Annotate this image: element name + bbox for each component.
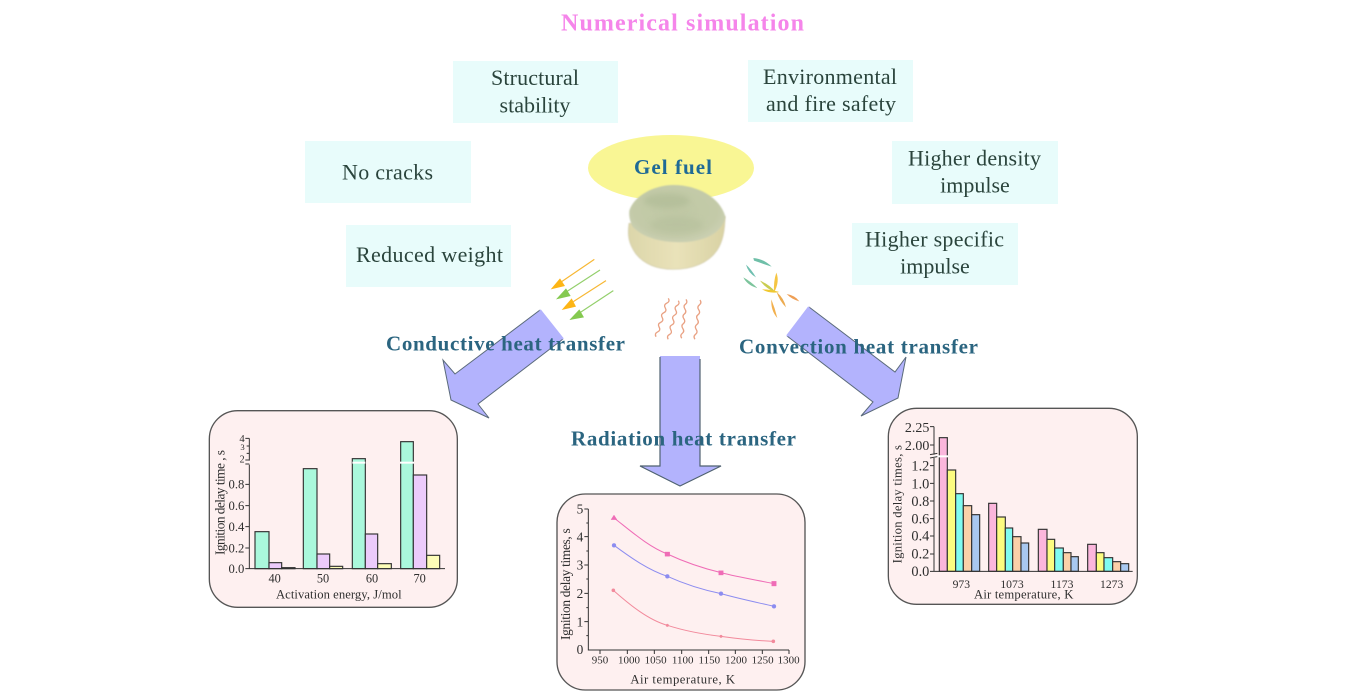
panel: air temperature bar chart: Ignition delay times, s: [890, 445, 904, 563]
label: radiation heat transfer: Radiation heat transfer: [571, 426, 796, 450]
panel: air temperature bar chart: 1273: [1100, 578, 1123, 591]
box: structural stability: Structural: [491, 65, 579, 90]
panel: activation energy bar chart: 2: [240, 455, 245, 466]
panel: air temperature line chart: [557, 494, 805, 690]
panel: air temperature line chart: 4: [577, 529, 584, 544]
line: series pink: [611, 515, 776, 586]
panel: air temperature line chart: 1050: [645, 655, 667, 667]
box: higher density impulse: impulse: [940, 172, 1010, 198]
panel: air temperature line chart: 1150: [699, 655, 721, 667]
box: structural stability: stability: [500, 92, 570, 118]
panel: air temperature bar chart: Air temperature, K: [974, 588, 1074, 602]
panel: air temperature bar chart: 1173: [1051, 578, 1074, 591]
icon: radiation waves: [655, 298, 701, 339]
panel: air temperature line chart: 0: [577, 642, 584, 657]
panel: air temperature line chart: 950: [592, 655, 609, 667]
bars: activation energy groups: [255, 442, 440, 569]
panel: air temperature bar chart: 1.0: [911, 476, 929, 492]
box: structural stability: [453, 61, 618, 123]
box: environmental and fire safety: [748, 60, 913, 122]
panel: activation energy bar chart: 0.8: [229, 478, 244, 492]
panel: activation energy bar chart: 0.2: [229, 541, 244, 555]
panel: activation energy bar chart: 50: [317, 572, 329, 586]
icon: conductive heat rays: [551, 259, 613, 320]
panel: air temperature line chart: 1100: [672, 655, 694, 667]
box: no cracks: [305, 141, 471, 203]
panel: air temperature line chart: 2: [577, 586, 583, 601]
box: higher density impulse: Higher density: [908, 146, 1041, 170]
bars: air temperature groups: [939, 438, 1129, 571]
panel: activation energy bar chart: 0.0: [229, 562, 244, 576]
panel: air temperature bar chart: 2.25: [905, 421, 929, 436]
panel: air temperature bar chart: [888, 408, 1137, 604]
panel: air temperature bar chart: 1073: [1000, 578, 1024, 591]
arrow: radiation: [640, 356, 721, 486]
panel: air temperature line chart: 1000: [618, 655, 640, 667]
panel: activation energy bar chart: 70: [414, 572, 426, 586]
box: reduced weight: [346, 225, 511, 287]
panel: air temperature bar chart: 0.6: [911, 511, 929, 527]
panel: air temperature bar chart: 0.4: [911, 529, 929, 545]
panel: air temperature bar chart: 973: [953, 578, 970, 591]
box: no cracks: No cracks: [342, 160, 433, 184]
box: higher specific impulse: impulse: [900, 254, 970, 278]
icon: gel fuel sample: [628, 185, 725, 269]
panel: air temperature bar chart: 0.0: [911, 564, 929, 580]
box: environmental and fire safety: and fire safety: [766, 91, 896, 116]
box: reduced weight: Reduced weight: [356, 242, 503, 267]
gel fuel ellipse label: Gel fuel: [634, 155, 712, 179]
icon: convection swirl: [743, 258, 799, 318]
gel fuel ellipse label: [588, 135, 754, 201]
box: higher density impulse: [892, 141, 1058, 204]
panel: activation energy bar chart: 40: [269, 572, 281, 586]
panel: air temperature line chart: 3: [577, 558, 584, 573]
panel: activation energy bar chart: 4: [239, 434, 245, 445]
panel: air temperature line chart: Air temperature, K: [630, 672, 736, 686]
panel: activation energy bar chart: 0.4: [229, 520, 245, 534]
label: convection heat transfer: Convection heat transfer: [739, 334, 978, 358]
panel: activation energy bar chart: [209, 411, 457, 607]
panel: air temperature bar chart: 0.2: [911, 547, 929, 563]
panel: air temperature line chart: 1: [577, 614, 583, 629]
panel: activation energy bar chart: 60: [366, 572, 378, 586]
panel: air temperature bar chart: 1.2: [911, 459, 929, 475]
panel: air temperature bar chart: 2.00: [905, 439, 929, 454]
panel: air temperature line chart: 1300: [778, 655, 800, 667]
box: environmental and fire safety: Environmental: [763, 64, 897, 89]
line: series red: [612, 589, 775, 643]
panel: air temperature line chart: 1250: [752, 655, 774, 667]
panel: air temperature line chart: 5: [577, 502, 584, 517]
panel: activation energy bar chart: Ignition delay time , s: [213, 450, 228, 555]
panel: air temperature line chart: 1200: [725, 655, 747, 667]
line: series blue: [612, 543, 776, 608]
arrow: conductive: [443, 310, 563, 418]
panel: air temperature bar chart: 0.8: [911, 494, 929, 510]
box: higher specific impulse: [852, 223, 1018, 285]
panel: activation energy bar chart: 3: [240, 442, 245, 452]
panel: air temperature line chart: Ignition delay times, s: [558, 528, 573, 640]
title: Numerical simulation: [561, 10, 804, 36]
panel: activation energy bar chart: 0.6: [229, 499, 244, 513]
arrow: convection: [787, 307, 906, 416]
panel: activation energy bar chart: Activation energy, J/mol: [276, 587, 402, 601]
box: higher specific impulse: Higher specific: [865, 226, 1004, 252]
label: conductive heat transfer: Conductive heat transfer: [386, 332, 625, 356]
